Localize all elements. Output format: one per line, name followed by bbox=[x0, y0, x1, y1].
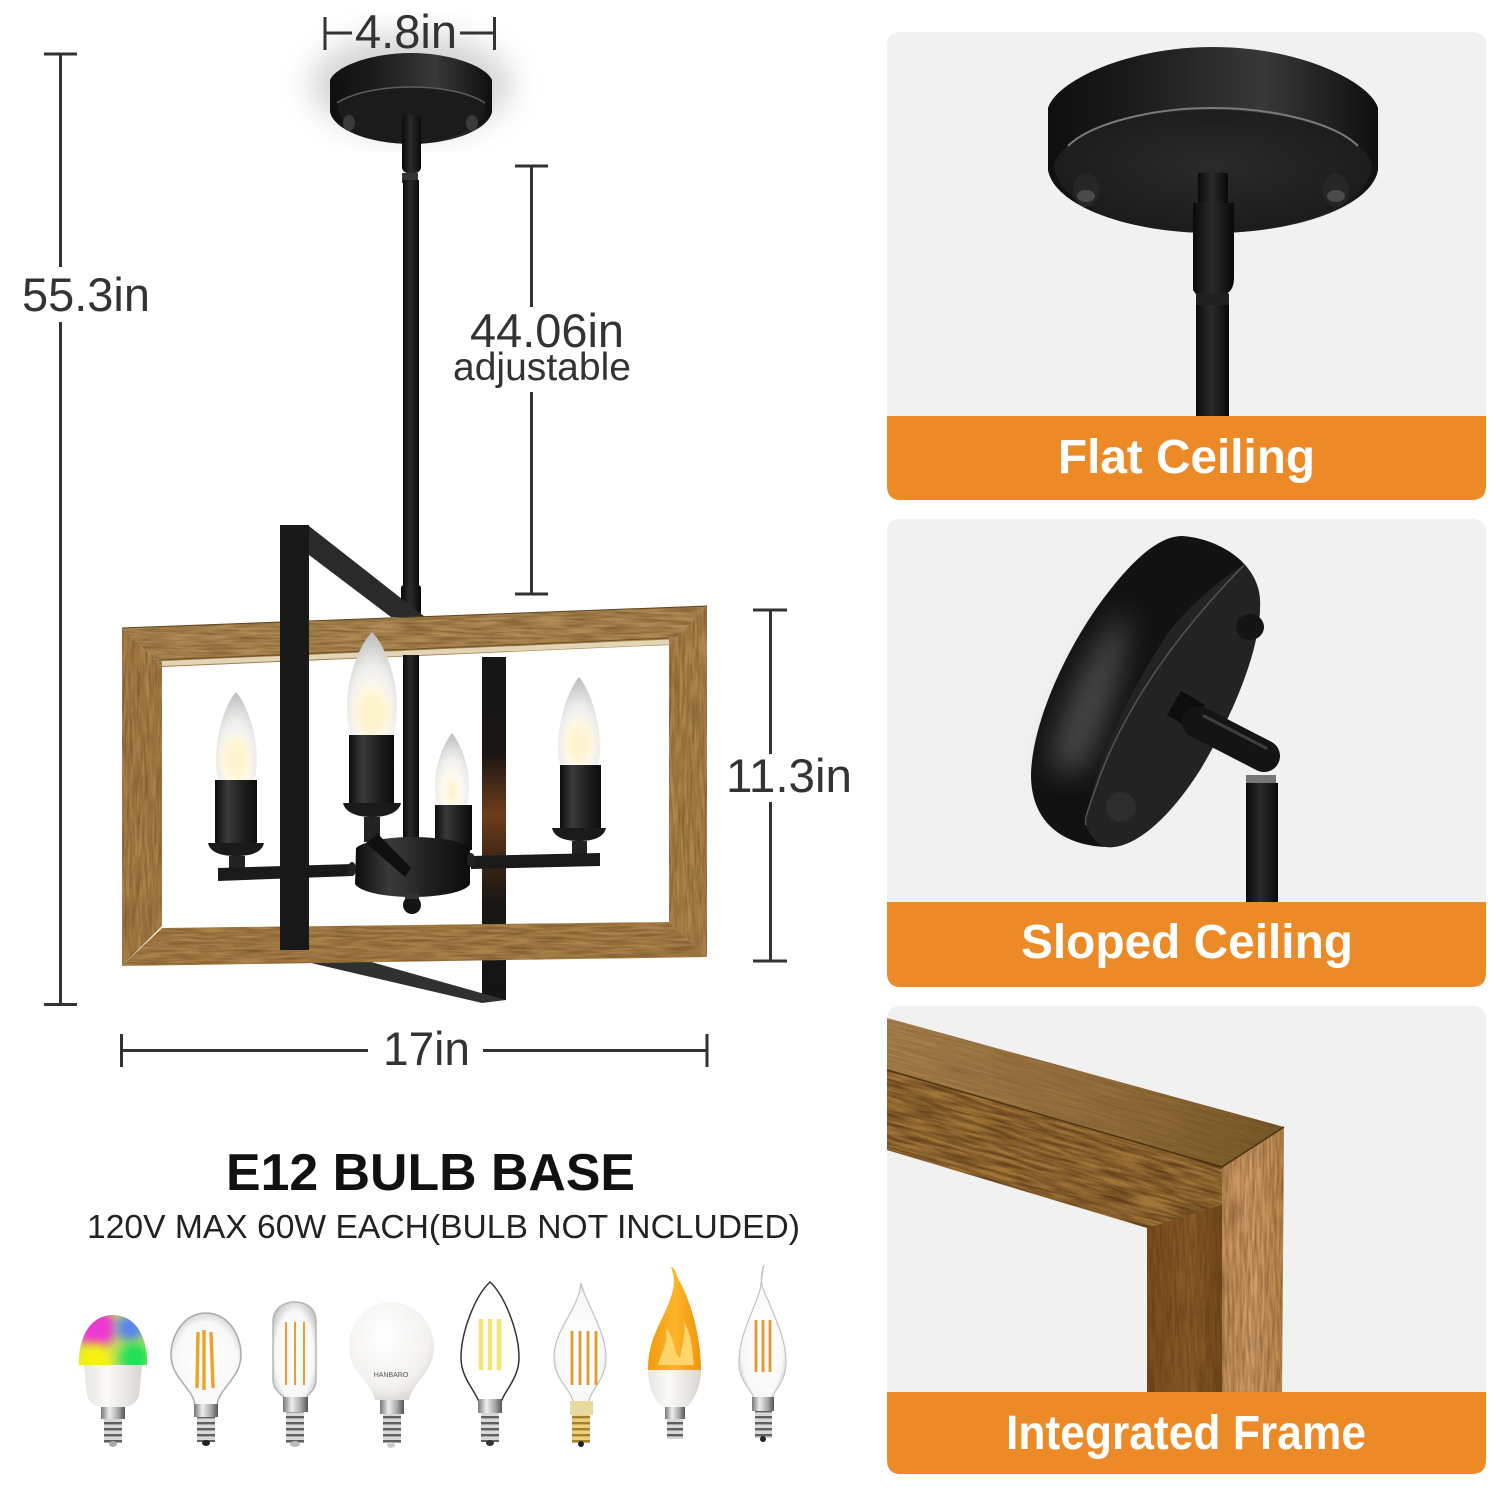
dimension: frame height 11.3in bbox=[726, 610, 852, 961]
panel: flat ceiling bbox=[887, 32, 1486, 500]
banner label: Sloped Ceiling bbox=[1021, 916, 1353, 969]
candle bulb: right bbox=[552, 677, 606, 858]
candle bulb: back centre bbox=[435, 733, 472, 850]
icon: globe filament bulb bbox=[171, 1313, 241, 1446]
ceiling canopy bbox=[330, 53, 492, 183]
icon: tube filament bulb bbox=[273, 1302, 316, 1447]
dimension: canopy width 4.8in: 4.8in bbox=[355, 5, 457, 58]
dimension: canopy width 4.8in bbox=[311, 5, 511, 134]
top diagonal strap bbox=[309, 526, 425, 617]
icon: white led bulb: HANBARO bbox=[374, 1372, 409, 1379]
swivel stem bbox=[1193, 173, 1234, 416]
text: bulb specification: 120V MAX 60W EACH(BULB NOT INCLUDED) bbox=[87, 1208, 800, 1245]
central hub bbox=[348, 834, 475, 914]
banner bbox=[887, 416, 1486, 500]
icon: rgb bulb bbox=[78, 1315, 148, 1447]
icon: clear candle bulb bbox=[461, 1282, 519, 1446]
tilted canopy bbox=[1031, 536, 1264, 847]
dimension: overall height 55.3in bbox=[22, 54, 150, 1005]
banner bbox=[887, 902, 1486, 987]
banner label: Integrated Frame bbox=[1006, 1407, 1366, 1460]
angled swivel stem bbox=[1174, 703, 1278, 902]
dimension: adjustable rod 44.06in: adjustable bbox=[453, 346, 631, 389]
panel: sloped ceiling bbox=[887, 519, 1486, 987]
icon: white led bulb bbox=[349, 1302, 434, 1448]
front vertical bar bbox=[280, 525, 309, 950]
suspension rod bbox=[401, 180, 421, 619]
lower rod bbox=[403, 655, 419, 845]
compatible bulbs row bbox=[75, 1265, 786, 1448]
dimension: overall height 55.3in: 55.3in bbox=[22, 268, 150, 321]
dimension: adjustable rod 44.06in bbox=[453, 166, 631, 594]
banner bbox=[887, 1392, 1486, 1474]
panel: integrated frame bbox=[886, 1006, 1486, 1474]
heading: bulb base: E12 BULB BASE bbox=[226, 1144, 635, 1202]
wooden frame bbox=[122, 606, 707, 966]
icon: flame tip candle bulb bbox=[554, 1283, 606, 1447]
chandelier product illustration bbox=[122, 53, 707, 1003]
dimension: frame width 17in: 17in bbox=[383, 1022, 470, 1075]
candle bulb: left bbox=[208, 692, 264, 870]
dimension: adjustable rod 44.06in: 44.06in bbox=[470, 304, 624, 357]
rear vertical bar bbox=[482, 657, 506, 1000]
wood frame corner detail bbox=[886, 1018, 1284, 1392]
icon: flicker flame bulb bbox=[648, 1267, 701, 1439]
flat canopy bbox=[1048, 47, 1378, 233]
candle bulb: front bbox=[343, 632, 401, 842]
dimension: frame height 11.3in: 11.3in bbox=[726, 749, 852, 802]
arms bbox=[218, 853, 600, 881]
icon: bent tip candle bulb bbox=[739, 1265, 786, 1442]
banner label: Flat Ceiling bbox=[1058, 431, 1315, 484]
dimension: frame width 17in bbox=[121, 1022, 707, 1075]
bottom diagonal strap bbox=[281, 945, 506, 1003]
